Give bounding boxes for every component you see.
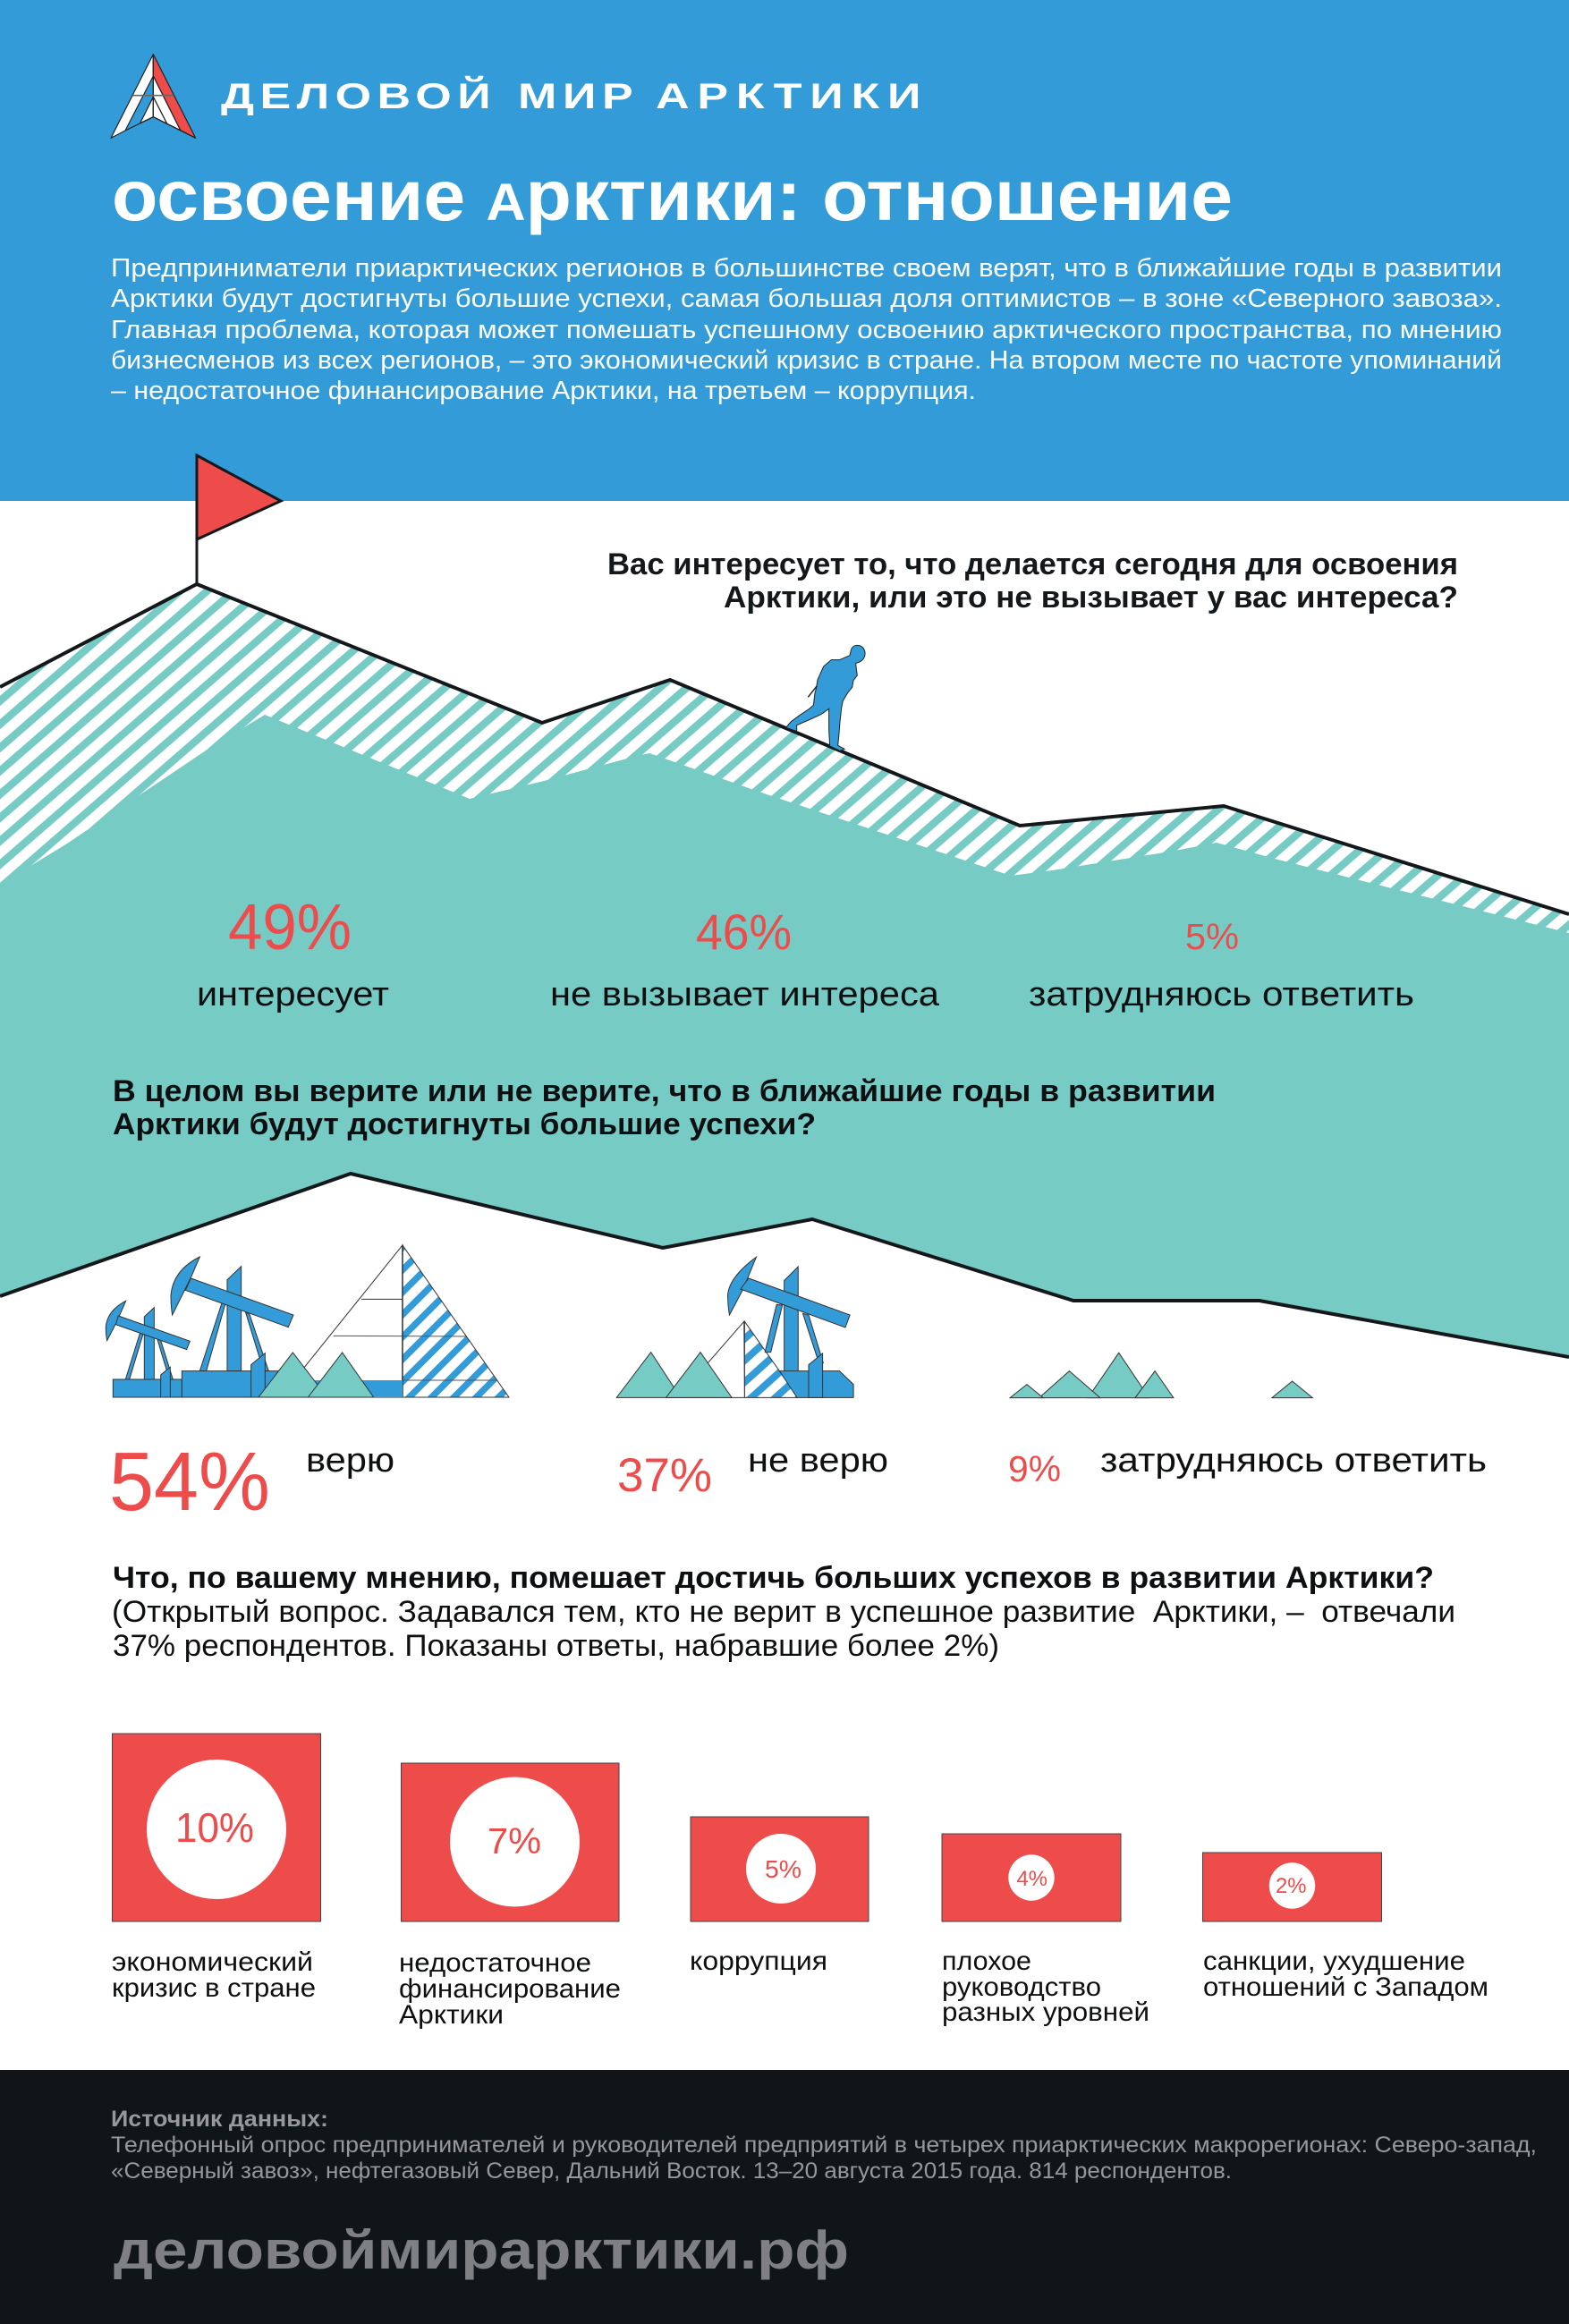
stat: 5% hard to say: 5% bbox=[1185, 916, 1239, 957]
intro text: бизнесменов из всех регионов, – это экономический кризис в стране. На втором месте по частоте упоминаний bbox=[111, 346, 1502, 375]
source text: «Северный завоз», нефтегазовый Север, Дальний Восток. 13–20 августа 2015 года. 814 респондентов. bbox=[111, 2159, 1232, 2184]
bar: corruption 5%: коррупция bbox=[690, 1947, 827, 1976]
pyramid bbox=[280, 1245, 509, 1397]
stat: 9% hard to say bbox=[1008, 1442, 1487, 1489]
stat: 5% hard to say bbox=[1029, 916, 1414, 1014]
stat: 49% interested: интересует bbox=[197, 976, 389, 1014]
bar: poor management 4% bbox=[942, 1834, 1149, 2027]
question 3: Что, по вашему мнению, помешает достичь больших успехов в развитии Арктики? bbox=[113, 1561, 1434, 1595]
question 3 bbox=[112, 1561, 1455, 1663]
title: освоение Арктики: отношение bbox=[112, 156, 1233, 235]
pyramid bbox=[678, 1321, 798, 1397]
teal hills bbox=[259, 1353, 374, 1397]
stat: 54% believe bbox=[109, 1435, 394, 1528]
stat: 9% hard to say: 9% bbox=[1008, 1448, 1061, 1489]
question 1: Вас интересует то, что делается сегодня для освоения bbox=[607, 547, 1458, 581]
icon: flag bbox=[197, 455, 281, 584]
stat: 5% hard to say: затрудняюсь ответить bbox=[1029, 976, 1414, 1014]
source text: Источник данных: bbox=[111, 2107, 328, 2132]
stat: 37% do not believe: не верю bbox=[748, 1442, 888, 1480]
question 1: Арктики, или это не вызывает у вас интереса? bbox=[724, 581, 1458, 615]
bar: corruption 5% bbox=[690, 1817, 869, 1976]
bar: insufficient funding 7%: недостаточное bbox=[399, 1948, 591, 1978]
question 2: Арктики будут достигнуты большие успехи? bbox=[113, 1107, 816, 1141]
icon: logo bbox=[111, 55, 196, 138]
bar: poor management 4%: руководство bbox=[942, 1972, 1101, 2002]
bar: poor management 4%: плохое bbox=[942, 1947, 1031, 1976]
bar: poor management 4%: разных уровней bbox=[942, 1997, 1149, 2027]
mountain: lower edge outline bbox=[0, 1174, 1569, 1357]
source text bbox=[111, 2107, 1537, 2184]
bar: corruption 5%: 5% bbox=[765, 1855, 801, 1883]
illustration: 54% pump jacks and mountains bbox=[106, 1245, 509, 1397]
stat: 46% not interested bbox=[550, 903, 940, 1014]
question 3: (Открытый вопрос. Задавался тем, кто не верит в успешное развитие Арктики, – отвечали bbox=[112, 1595, 1455, 1629]
intro text: – недостаточное финансирование Арктики, на третьем – коррупция. bbox=[111, 377, 976, 405]
stat: 37% do not believe: 37% bbox=[617, 1449, 712, 1502]
bar: sanctions 2%: 2% bbox=[1276, 1874, 1306, 1898]
bar: insufficient funding 7%: финансирование bbox=[399, 1974, 621, 2004]
stat: 9% hard to say: затрудняюсь ответить bbox=[1100, 1442, 1487, 1480]
bar: insufficient funding 7% bbox=[399, 1763, 621, 2030]
bar: sanctions 2%: отношений с Западом bbox=[1203, 1972, 1488, 2002]
question 3: 37% респондентов. Показаны ответы, набравшие более 2%) bbox=[113, 1629, 999, 1663]
stat: 49% interested bbox=[197, 892, 389, 1014]
stat: 49% interested: 49% bbox=[228, 892, 352, 963]
brand name: АРКТИКИ bbox=[656, 76, 920, 116]
bar: insufficient funding 7%: Арктики bbox=[399, 2000, 504, 2030]
illustration: 9% small hills bbox=[1010, 1353, 1312, 1398]
brand name: ДЕЛОВОЙ bbox=[221, 76, 491, 116]
stat: 46% not interested: не вызывает интереса bbox=[550, 976, 940, 1014]
intro text bbox=[111, 254, 1502, 405]
panel: header bbox=[0, 0, 1569, 501]
panel: footer bbox=[0, 2070, 1569, 2324]
question 1 bbox=[607, 547, 1458, 615]
mountain: striped slope bbox=[0, 584, 1569, 984]
source text: Телефонный опрос предпринимателей и руководителей предприятий в четырех приарктических макрорегионах: Северо-запад, bbox=[111, 2133, 1537, 2158]
bar: sanctions 2% bbox=[1202, 1853, 1488, 2002]
bar: insufficient funding 7%: 7% bbox=[488, 1820, 541, 1862]
bar: poor management 4%: 4% bbox=[1016, 1867, 1047, 1891]
pump jack bbox=[728, 1257, 853, 1397]
stat: 54% believe: 54% bbox=[109, 1435, 270, 1528]
teal hills bbox=[616, 1353, 732, 1397]
intro text: Предприниматели приарктических регионов в большинстве своем верят, что в ближайшие годы в развитии bbox=[111, 254, 1502, 283]
brand name bbox=[221, 76, 920, 116]
bar: sanctions 2%: санкции, ухудшение bbox=[1203, 1947, 1465, 1976]
intro text: Главная проблема, которая может помешать успешному освоению арктического пространства, по мнению bbox=[111, 316, 1502, 344]
bar: economic crisis 10%: экономический bbox=[112, 1947, 313, 1977]
large pump jack bbox=[171, 1257, 403, 1397]
website: деловоймирарктики.рф bbox=[114, 2220, 849, 2280]
stat: 46% not interested: 46% bbox=[696, 903, 792, 960]
bar: economic crisis 10% bbox=[112, 1734, 320, 2003]
bar: economic crisis 10%: 10% bbox=[175, 1804, 254, 1851]
stat: 54% believe: верю bbox=[306, 1442, 394, 1480]
small pump jack bbox=[106, 1301, 190, 1397]
question 2: В целом вы верите или не верите, что в ближайшие годы в развитии bbox=[113, 1074, 1216, 1108]
question 2 bbox=[113, 1074, 1216, 1141]
intro text: Арктики будут достигнуты большие успехи, самая большая доля оптимистов – в зоне «Северного завоза». bbox=[111, 284, 1502, 313]
icon: hiker bbox=[786, 645, 865, 751]
brand name: МИР bbox=[518, 76, 633, 116]
stat: 37% do not believe bbox=[617, 1442, 888, 1502]
illustration: 37% pump jack and mountains bbox=[616, 1257, 853, 1397]
bar: economic crisis 10%: кризис в стране bbox=[112, 1973, 316, 2003]
mountain: ridge outline bbox=[0, 584, 1569, 914]
mountain: teal body bbox=[0, 715, 1569, 1355]
